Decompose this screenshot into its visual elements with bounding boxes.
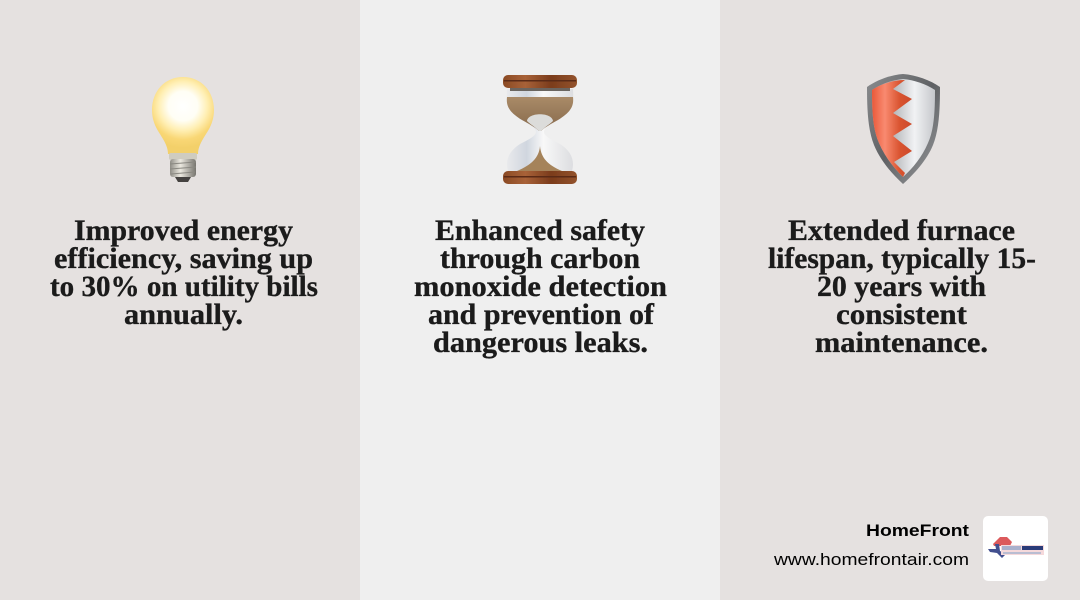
heading: furnace lifespan benefit: maintenance.: [815, 326, 988, 359]
heading: safety benefit: dangerous leaks.: [433, 326, 648, 359]
heading: furnace lifespan benefit: 20 years with: [817, 270, 986, 303]
heading: furnace lifespan benefit: Extended furnace: [788, 214, 1015, 247]
heading: safety benefit: through carbon: [440, 242, 640, 275]
heading: energy efficiency benefit: Improved energy: [74, 214, 293, 247]
heading: furnace lifespan benefit: consistent: [836, 298, 967, 331]
heading: safety benefit: Enhanced safety: [435, 214, 645, 247]
icon: light bulb: [152, 77, 214, 182]
icon: shield: [867, 74, 940, 184]
panel: energy efficiency background: [0, 0, 360, 600]
heading: energy efficiency benefit: [50, 214, 318, 331]
heading: safety benefit: [414, 214, 667, 359]
heading: safety benefit: monoxide detection: [414, 270, 667, 303]
heading: energy efficiency benefit: annually.: [124, 298, 243, 331]
brand name: HomeFront: [866, 521, 969, 540]
panel: furnace lifespan background: [720, 0, 1080, 600]
heading: energy efficiency benefit: efficiency, saving up: [54, 242, 313, 275]
logo: HomeFront badge: [983, 516, 1048, 581]
panel: safety background: [360, 0, 720, 600]
website url: www.homefrontair.com: [773, 550, 969, 569]
heading: energy efficiency benefit: to 30% on utility bills: [50, 270, 318, 303]
icon: hourglass: [503, 75, 577, 184]
heading: safety benefit: and prevention of: [428, 298, 655, 331]
heading: furnace lifespan benefit: [768, 214, 1036, 359]
heading: furnace lifespan benefit: lifespan, typically 15-: [768, 242, 1036, 275]
